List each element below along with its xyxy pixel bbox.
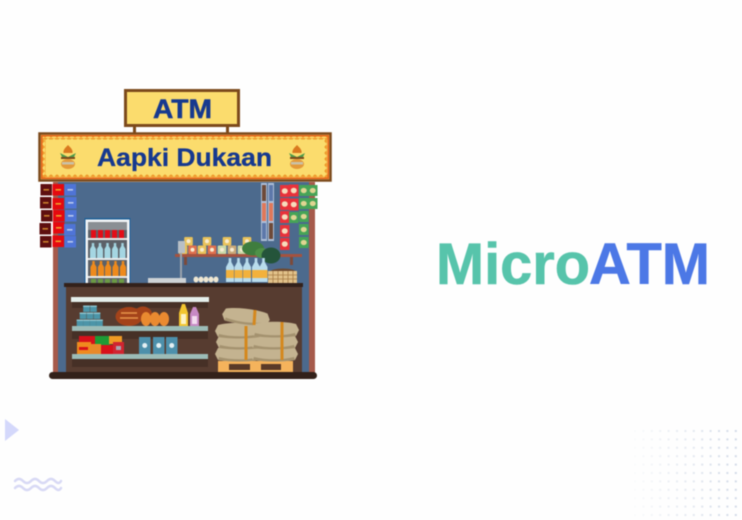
boxes — [139, 337, 178, 354]
ATM sign — [126, 90, 238, 133]
shop name banner: Aapki Dukaan — [97, 144, 272, 172]
green cans — [91, 279, 124, 283]
refrigerator — [84, 218, 130, 284]
title: MicroATM — [436, 232, 710, 297]
sign posts — [133, 126, 229, 133]
leafy greens — [242, 242, 280, 264]
counter — [64, 283, 303, 373]
eggs — [194, 276, 218, 282]
assorted food packets — [77, 336, 124, 354]
pallet — [218, 361, 293, 372]
red cans — [91, 230, 124, 238]
grain sacks — [215, 306, 299, 362]
icon: wave lines decoration — [15, 479, 61, 490]
title: MicroATM: Micro — [436, 232, 590, 297]
ATM sign: ATM — [153, 94, 212, 124]
upper wall shelf with jars — [175, 237, 302, 265]
illustration: Aapki Dukaan shop — [40, 90, 330, 379]
title: MicroATM: ATM — [589, 232, 710, 297]
hanging snack packets left — [40, 184, 76, 248]
shop pillars — [53, 182, 315, 374]
water bottles — [90, 243, 126, 258]
hanging strips right — [261, 183, 274, 241]
large water bottles — [226, 258, 268, 282]
basket — [268, 268, 297, 283]
hanging snack packets right — [280, 184, 318, 250]
floor base — [49, 372, 317, 379]
stacked cans — [77, 306, 103, 326]
icon: kalash right — [289, 145, 305, 169]
bread and pumpkins — [116, 306, 169, 326]
shop name banner — [40, 134, 330, 180]
shop back wall — [58, 182, 309, 374]
scale — [148, 241, 186, 283]
icon: play triangle decoration — [5, 419, 19, 441]
shelves — [71, 297, 209, 359]
dot grid decoration — [652, 430, 738, 516]
orange bottles — [90, 261, 126, 276]
detergent bottles — [179, 304, 199, 326]
icon: kalash left — [60, 145, 76, 169]
